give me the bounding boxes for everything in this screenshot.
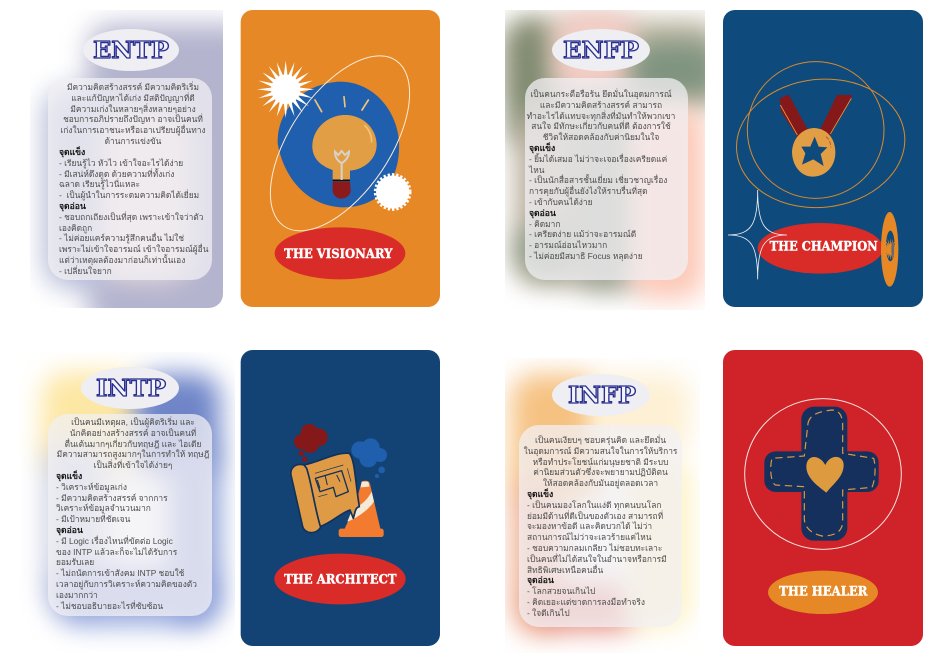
text card bbox=[525, 78, 688, 280]
icon: medal bbox=[780, 95, 852, 177]
panel: INTP description bbox=[25, 354, 235, 644]
intro: เป็นคนมีเหตุผล, เป็นผู้คิดริเริ่ม และ bbox=[71, 417, 195, 427]
label: The Champion: THE CHAMPION bbox=[770, 239, 878, 254]
intro bbox=[60, 81, 206, 146]
strengths and weaknesses bbox=[59, 146, 208, 276]
icon: light bulb on blue blob bbox=[278, 82, 399, 207]
icon: traffic cone bbox=[339, 481, 384, 537]
strengths and weaknesses: สถานการณ์ไม่ว่าจะเลวร้ายแค่ไหน bbox=[527, 532, 651, 542]
intro: เป็นคนกระตือรือร้น ยึดมั่นในอุดมการณ์ bbox=[530, 89, 672, 99]
strengths and weaknesses: เวลาอยู่กับการวิเคราะห์ความคิดของตัว bbox=[56, 579, 197, 589]
strengths and weaknesses: - อารมณ์อ่อนไหวมาก bbox=[529, 240, 607, 250]
text card bbox=[48, 78, 212, 280]
strengths and weaknesses: - เข้ากับคนได้ง่าย - คิดมาก bbox=[529, 197, 592, 229]
strengths and weaknesses: วิเคราะห์ข้อมูลจำนวนมาก bbox=[56, 503, 151, 513]
card: The Visionary bbox=[240, 10, 440, 307]
strengths and weaknesses: จุดแข็ง bbox=[56, 471, 82, 481]
title: ENTP: ENTP bbox=[93, 37, 169, 64]
strengths and weaknesses: - ไม่ถนัดการเข้าสังคม INTP ชอบใช้ bbox=[56, 568, 184, 578]
intro: หรือทำประโยชน์แก่มนุษยชาติ มีระบบ bbox=[533, 457, 668, 467]
card: The Architect bbox=[240, 350, 440, 646]
intro: เก่งในการเอาชนะหรือเอาเปรียบผู้อื่นทาง bbox=[60, 125, 206, 135]
icon: blueprint scroll bbox=[291, 453, 359, 533]
title: INTP bbox=[81, 367, 179, 409]
strengths and weaknesses: - มีเสน่ห์ดึงดูด ด้วยความที่ทั้งเก่ง bbox=[59, 169, 174, 179]
strengths and weaknesses: จุดแข็ง bbox=[527, 489, 553, 499]
orbit rings bbox=[730, 62, 911, 216]
strengths and weaknesses: - ไม่ค่อยแคร์ความรู้สึกคนอื่น ไม่ใช่ bbox=[59, 233, 184, 243]
intro: ค่านิยมส่วนตัวซึ่งจะพยายามปฏิบัติตน bbox=[533, 467, 668, 477]
intro: ชอบการอภิปรายถึงปัญหา อาจเป็นคนที่ bbox=[63, 114, 203, 124]
label: The Healer: THE HEALER bbox=[779, 584, 868, 599]
intro: สนใจ มีทักษะเกี่ยวกับคนที่ดี ต้องการใช้ bbox=[531, 121, 671, 131]
icon: bandage cross with heart bbox=[764, 407, 879, 541]
strengths and weaknesses: สิทธิพิเศษเหนือคนอื่น - โลกสวยจนเกินไป bbox=[527, 565, 603, 596]
panel: ENFP description bbox=[505, 10, 705, 310]
strengths and weaknesses: - เครียดง่าย แม้ว่าจะอารมณ์ดี bbox=[529, 229, 636, 239]
orbit ring bbox=[243, 32, 437, 254]
card: The Healer bbox=[723, 350, 923, 646]
strengths and weaknesses: - มีเป้าหมายที่ชัดเจน - มี Logic เรื่องไหนที่ขัดต่อ Logic bbox=[56, 514, 173, 546]
title: ENTP bbox=[84, 29, 179, 71]
strengths and weaknesses bbox=[528, 142, 667, 262]
strengths and weaknesses: การคุยกับผู้อื่นยังไงให้ราบรื่นที่สุด bbox=[529, 186, 648, 196]
strengths and weaknesses: - วิเคราะห์ข้อมูลเก่ง bbox=[56, 482, 127, 492]
intro: ด้านการแข่งขัน bbox=[105, 136, 161, 146]
text card bbox=[519, 425, 682, 627]
strengths and weaknesses: เองคิดถูก bbox=[59, 223, 92, 233]
blurred gradient background bbox=[505, 358, 700, 652]
strengths and weaknesses: จุดแข็ง bbox=[59, 147, 85, 157]
label: The Architect bbox=[274, 554, 406, 604]
intro: ตื่นเต้นมากๆเกี่ยวกับทฤษฎี และ ไอเดีย bbox=[65, 439, 201, 449]
title: ENFP: ENFP bbox=[563, 37, 639, 64]
intro: เป็นสิ่งที่เข้าใจได้ง่ายๆ bbox=[94, 460, 172, 470]
strengths and weaknesses: - ชอบความกลมเกลียว ไม่ชอบทะเลาะ bbox=[527, 543, 662, 553]
intro bbox=[524, 434, 678, 488]
title: INFP bbox=[552, 374, 650, 416]
strengths and weaknesses: เป็นคนที่ไม่ได้สนใจในอำนาจหรือการมี bbox=[527, 554, 667, 564]
title: INTP: INTP bbox=[96, 375, 166, 402]
label: The Architect: THE ARCHITECT bbox=[284, 572, 397, 587]
strengths and weaknesses: - คิดเยอะแต่ขาดการลงมือทำจริง bbox=[527, 597, 645, 607]
strengths and weaknesses: จุดแข็ง bbox=[529, 143, 555, 153]
white circle ring bbox=[745, 399, 901, 549]
strengths and weaknesses: จะมองหาข้อดี และคิดบวกได้ ไม่ว่า bbox=[527, 521, 652, 531]
strengths and weaknesses: จุดอ่อน bbox=[56, 525, 83, 535]
title: ENFP bbox=[552, 29, 650, 71]
icon: orange burst ring bbox=[881, 212, 899, 287]
strengths and weaknesses: ของ INTP แล้วละก็จะไม่ได้รับการ bbox=[56, 547, 177, 557]
strengths and weaknesses: จุดอ่อน bbox=[529, 208, 556, 218]
intro: มีความสามารถสูงมากๆในการทำให้ ทฤษฎี bbox=[57, 449, 209, 459]
strengths and weaknesses: เองมากกว่า bbox=[56, 590, 98, 600]
strengths and weaknesses: - ไม่ชอบอธิบายอะไรที่ซับซ้อน bbox=[56, 601, 163, 611]
intro: ในอุดมการณ์ มีความสนใจในการให้บริการ bbox=[524, 446, 677, 456]
blurred gradient background bbox=[505, 10, 705, 310]
panel: ENTP description bbox=[30, 10, 223, 308]
intro: มีความเก่งในหลายๆสิ่งหลายๆอย่าง bbox=[70, 104, 196, 114]
strengths and weaknesses: - เป็นคนมองโลกในแง่ดี ทุกคนบนโลก bbox=[527, 500, 661, 510]
strengths and weaknesses: - เปลี่ยนใจยาก bbox=[59, 266, 112, 276]
blurred gradient background bbox=[30, 10, 223, 308]
intro: ทำอะไรได้แทบจะทุกสิ่งที่มันทำให้พวกเขา bbox=[527, 111, 675, 121]
icon: white sparkle bbox=[728, 190, 787, 279]
strengths and weaknesses: - เป็นนักสื่อสารชั้นเยี่ยม เชี่ยวชาญเรื่อง bbox=[529, 175, 667, 185]
strengths and weaknesses: ไหน bbox=[529, 165, 544, 175]
icon: blue thought cloud bbox=[351, 438, 387, 478]
intro: ให้สอดคล้องกับมันอยู่ตลอดเวลา bbox=[543, 478, 658, 488]
label: The Visionary: THE VISIONARY bbox=[284, 246, 393, 261]
icon: white gear burst bbox=[375, 174, 410, 210]
label: The Healer bbox=[768, 571, 878, 614]
strengths and weaknesses: - เรียนรู้ไว หัวไว เข้าใจอะไรได้ง่าย bbox=[59, 158, 183, 168]
strengths and weaknesses: - ยิ้มได้เสมอ ไม่ว่าจะเจอเรื่องเครียดแค่ bbox=[529, 154, 667, 164]
strengths and weaknesses: จุดอ่อน bbox=[59, 201, 86, 211]
strengths and weaknesses: ฉลาด เรียนรู้ไวนี่แหละ bbox=[59, 179, 140, 189]
blurred gradient background bbox=[25, 354, 235, 644]
strengths and weaknesses: ยอมรับเลย bbox=[56, 557, 94, 567]
strengths and weaknesses: - เป็นผู้นำในการระดมความคิดได้เยี่ยม - ชอบถกเถียงเป็นที่สุด เพราะเข้าใจว่าตัว bbox=[59, 190, 203, 222]
strengths and weaknesses: - ไม่ค่อยมีสมาธิ Focus หลุดง่าย bbox=[529, 251, 643, 261]
label: The Visionary bbox=[275, 227, 405, 279]
strengths and weaknesses: - ใจดีเกินไป bbox=[527, 608, 570, 618]
label: The Champion bbox=[758, 223, 883, 274]
icon: white starburst bbox=[257, 61, 314, 118]
intro: ชีวิตให้สอดคล้องกับค่านิยมในใจ bbox=[543, 132, 659, 142]
intro: และแก้ปัญหาได้เก่ง มีสติปัญญาที่ดี bbox=[71, 93, 195, 103]
strengths and weaknesses: - มีความคิดสร้างสรรค์ จากการ bbox=[56, 493, 168, 503]
text card bbox=[48, 414, 212, 616]
panel: INFP description bbox=[505, 358, 700, 652]
intro bbox=[526, 88, 675, 142]
intro bbox=[57, 416, 209, 470]
strengths and weaknesses: เพราะไม่เข้าใจอารมณ์ เข้าใจอารมณ์ผู้อื่น bbox=[59, 244, 208, 254]
intro: มีความคิดสร้างสรรค์ มีความคิดริเริ่ม bbox=[67, 82, 199, 92]
strengths and weaknesses: จุดอ่อน bbox=[527, 575, 554, 585]
title: INFP: INFP bbox=[568, 382, 636, 409]
icon: red thought cloud bbox=[294, 424, 328, 462]
intro: นักคิดอย่างสร้างสรรค์ อาจเป็นคนที่ bbox=[70, 428, 196, 438]
strengths and weaknesses bbox=[56, 470, 197, 611]
intro: และมีความคิดสร้างสรรค์ สามารถ bbox=[540, 100, 662, 110]
strengths and weaknesses: ย่อมมีด้านที่ดีเป็นของตัวเอง สามารถที่ bbox=[527, 511, 663, 521]
strengths and weaknesses: แต่ว่าเหตุผลต้องมาก่อนก็เท่านั้นเอง bbox=[59, 255, 185, 265]
intro: เป็นคนเงียบๆ ชอบครุ่นคิด และยึดมั่น bbox=[535, 435, 666, 445]
strengths and weaknesses bbox=[527, 488, 667, 618]
card: The Champion bbox=[723, 10, 923, 307]
